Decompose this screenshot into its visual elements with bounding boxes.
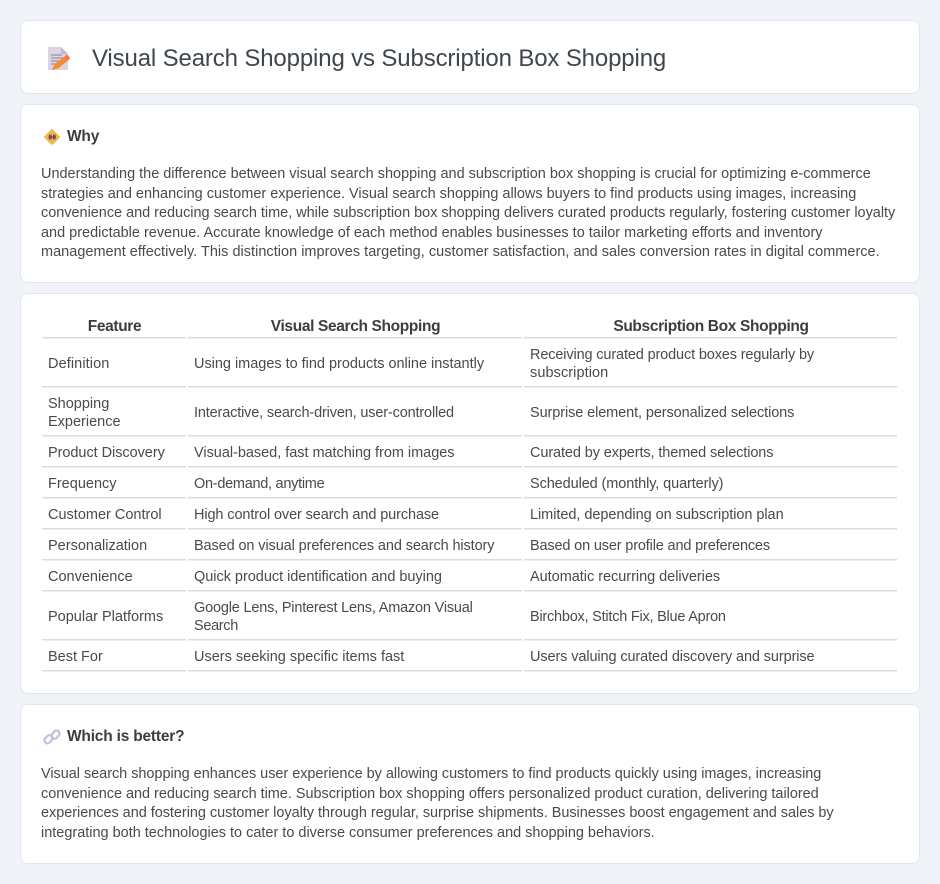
text block: which is better: convenience and reducing search time. Subscription box shopping offers personalized product curation, delivering tailored	[41, 786, 819, 802]
row: popular platforms: Birchbox, Stitch Fix, Blue Apron	[530, 609, 726, 625]
row: shopping experience: Shopping	[48, 396, 109, 412]
row: customer control: Limited, depending on subscription plan	[530, 507, 784, 523]
panel: comparison table	[20, 293, 920, 694]
table header: Subscription Box Shopping	[613, 318, 809, 335]
row: customer control: High control over search and purchase	[194, 507, 439, 523]
row: frequency: Scheduled (monthly, quarterly)	[530, 476, 723, 492]
row: convenience: Quick product identification and buying	[194, 569, 442, 585]
row: shopping experience: Surprise element, personalized selections	[530, 405, 794, 421]
icon: memo with pencil	[48, 47, 70, 70]
text block: why: management effectively. This distinction improves targeting, customer satisfaction, and sales conversion rates in digital commerce.	[41, 244, 880, 260]
heading: which is better: Which is better?	[67, 728, 184, 745]
row: best for	[48, 649, 814, 665]
panel: why	[20, 104, 920, 283]
row: frequency: On-demand, anytime	[194, 476, 324, 492]
row: frequency: Frequency	[48, 476, 117, 492]
row: personalization: Personalization	[48, 538, 147, 554]
row: shopping experience	[48, 396, 794, 430]
table header: Feature	[88, 318, 141, 335]
text block: which is better: experiences and fostering customer loyalty through regular, surprise shipments. Businesses boost engagement and sales by	[41, 805, 834, 821]
row: best for: Best For	[48, 649, 103, 665]
row: best for: Users valuing curated discovery and surprise	[530, 649, 814, 665]
row: definition	[48, 347, 814, 381]
row: product discovery	[48, 445, 773, 461]
row: customer control: Customer Control	[48, 507, 162, 523]
row: popular platforms	[48, 600, 726, 634]
row: personalization: Based on user profile and preferences	[530, 538, 770, 554]
row: convenience	[48, 569, 720, 585]
text block: why: and predictable revenue. Accurate knowledge of each method enables businesses to tailor marketing efforts and inventory	[41, 224, 823, 240]
row: shopping experience: Interactive, search-driven, user-controlled	[194, 405, 454, 421]
text block: why	[41, 166, 896, 260]
text block: which is better: Visual search shopping enhances user experience by allowing customers to find products quickly using images, increasing	[41, 766, 821, 782]
text block: why: convenience and reducing search time, while subscription box shopping delivers curated products regularly, fostering customer loyalty	[41, 205, 895, 221]
heading: why: Why	[67, 128, 99, 145]
row: popular platforms: Google Lens, Pinterest Lens, Amazon Visual	[194, 600, 473, 616]
row: shopping experience: Experience	[48, 414, 121, 430]
text block: why: strategies and enhancing customer experience. Visual search shopping allows buyers to find products using images, increasing	[41, 186, 856, 202]
row: definition: Definition	[48, 356, 109, 372]
row: product discovery: Curated by experts, themed selections	[530, 445, 773, 461]
row: personalization: Based on visual preferences and search history	[194, 538, 494, 554]
title: Visual Search Shopping vs Subscription Box Shopping	[92, 45, 666, 72]
row: popular platforms: Search	[194, 618, 238, 634]
table header	[88, 318, 809, 335]
row: popular platforms: Popular Platforms	[48, 609, 163, 625]
row: personalization	[48, 538, 770, 554]
panel: which is better	[20, 704, 920, 864]
icon: link	[43, 730, 61, 744]
icon: diamond sign	[44, 129, 60, 145]
row: frequency	[48, 476, 723, 492]
row: definition: Receiving curated product boxes regularly by	[530, 347, 814, 363]
row: product discovery: Visual-based, fast matching from images	[194, 445, 454, 461]
row: definition: subscription	[530, 365, 608, 381]
text block: which is better	[41, 766, 834, 840]
text block: why: Understanding the difference between visual search shopping and subscription box shopping is crucial for optimizing e-commerce	[41, 166, 871, 182]
row: definition: Using images to find products online instantly	[194, 356, 484, 372]
table header: Visual Search Shopping	[271, 318, 440, 335]
panel: title header	[20, 20, 920, 94]
row: product discovery: Product Discovery	[48, 445, 165, 461]
row: best for: Users seeking specific items fast	[194, 649, 404, 665]
row: convenience: Convenience	[48, 569, 133, 585]
row: customer control	[48, 507, 784, 523]
text block: which is better: integrating both technologies to cater to diverse consumer preferences and shopping behaviors.	[41, 824, 655, 840]
row: convenience: Automatic recurring deliveries	[530, 569, 720, 585]
table: comparison	[42, 318, 897, 672]
